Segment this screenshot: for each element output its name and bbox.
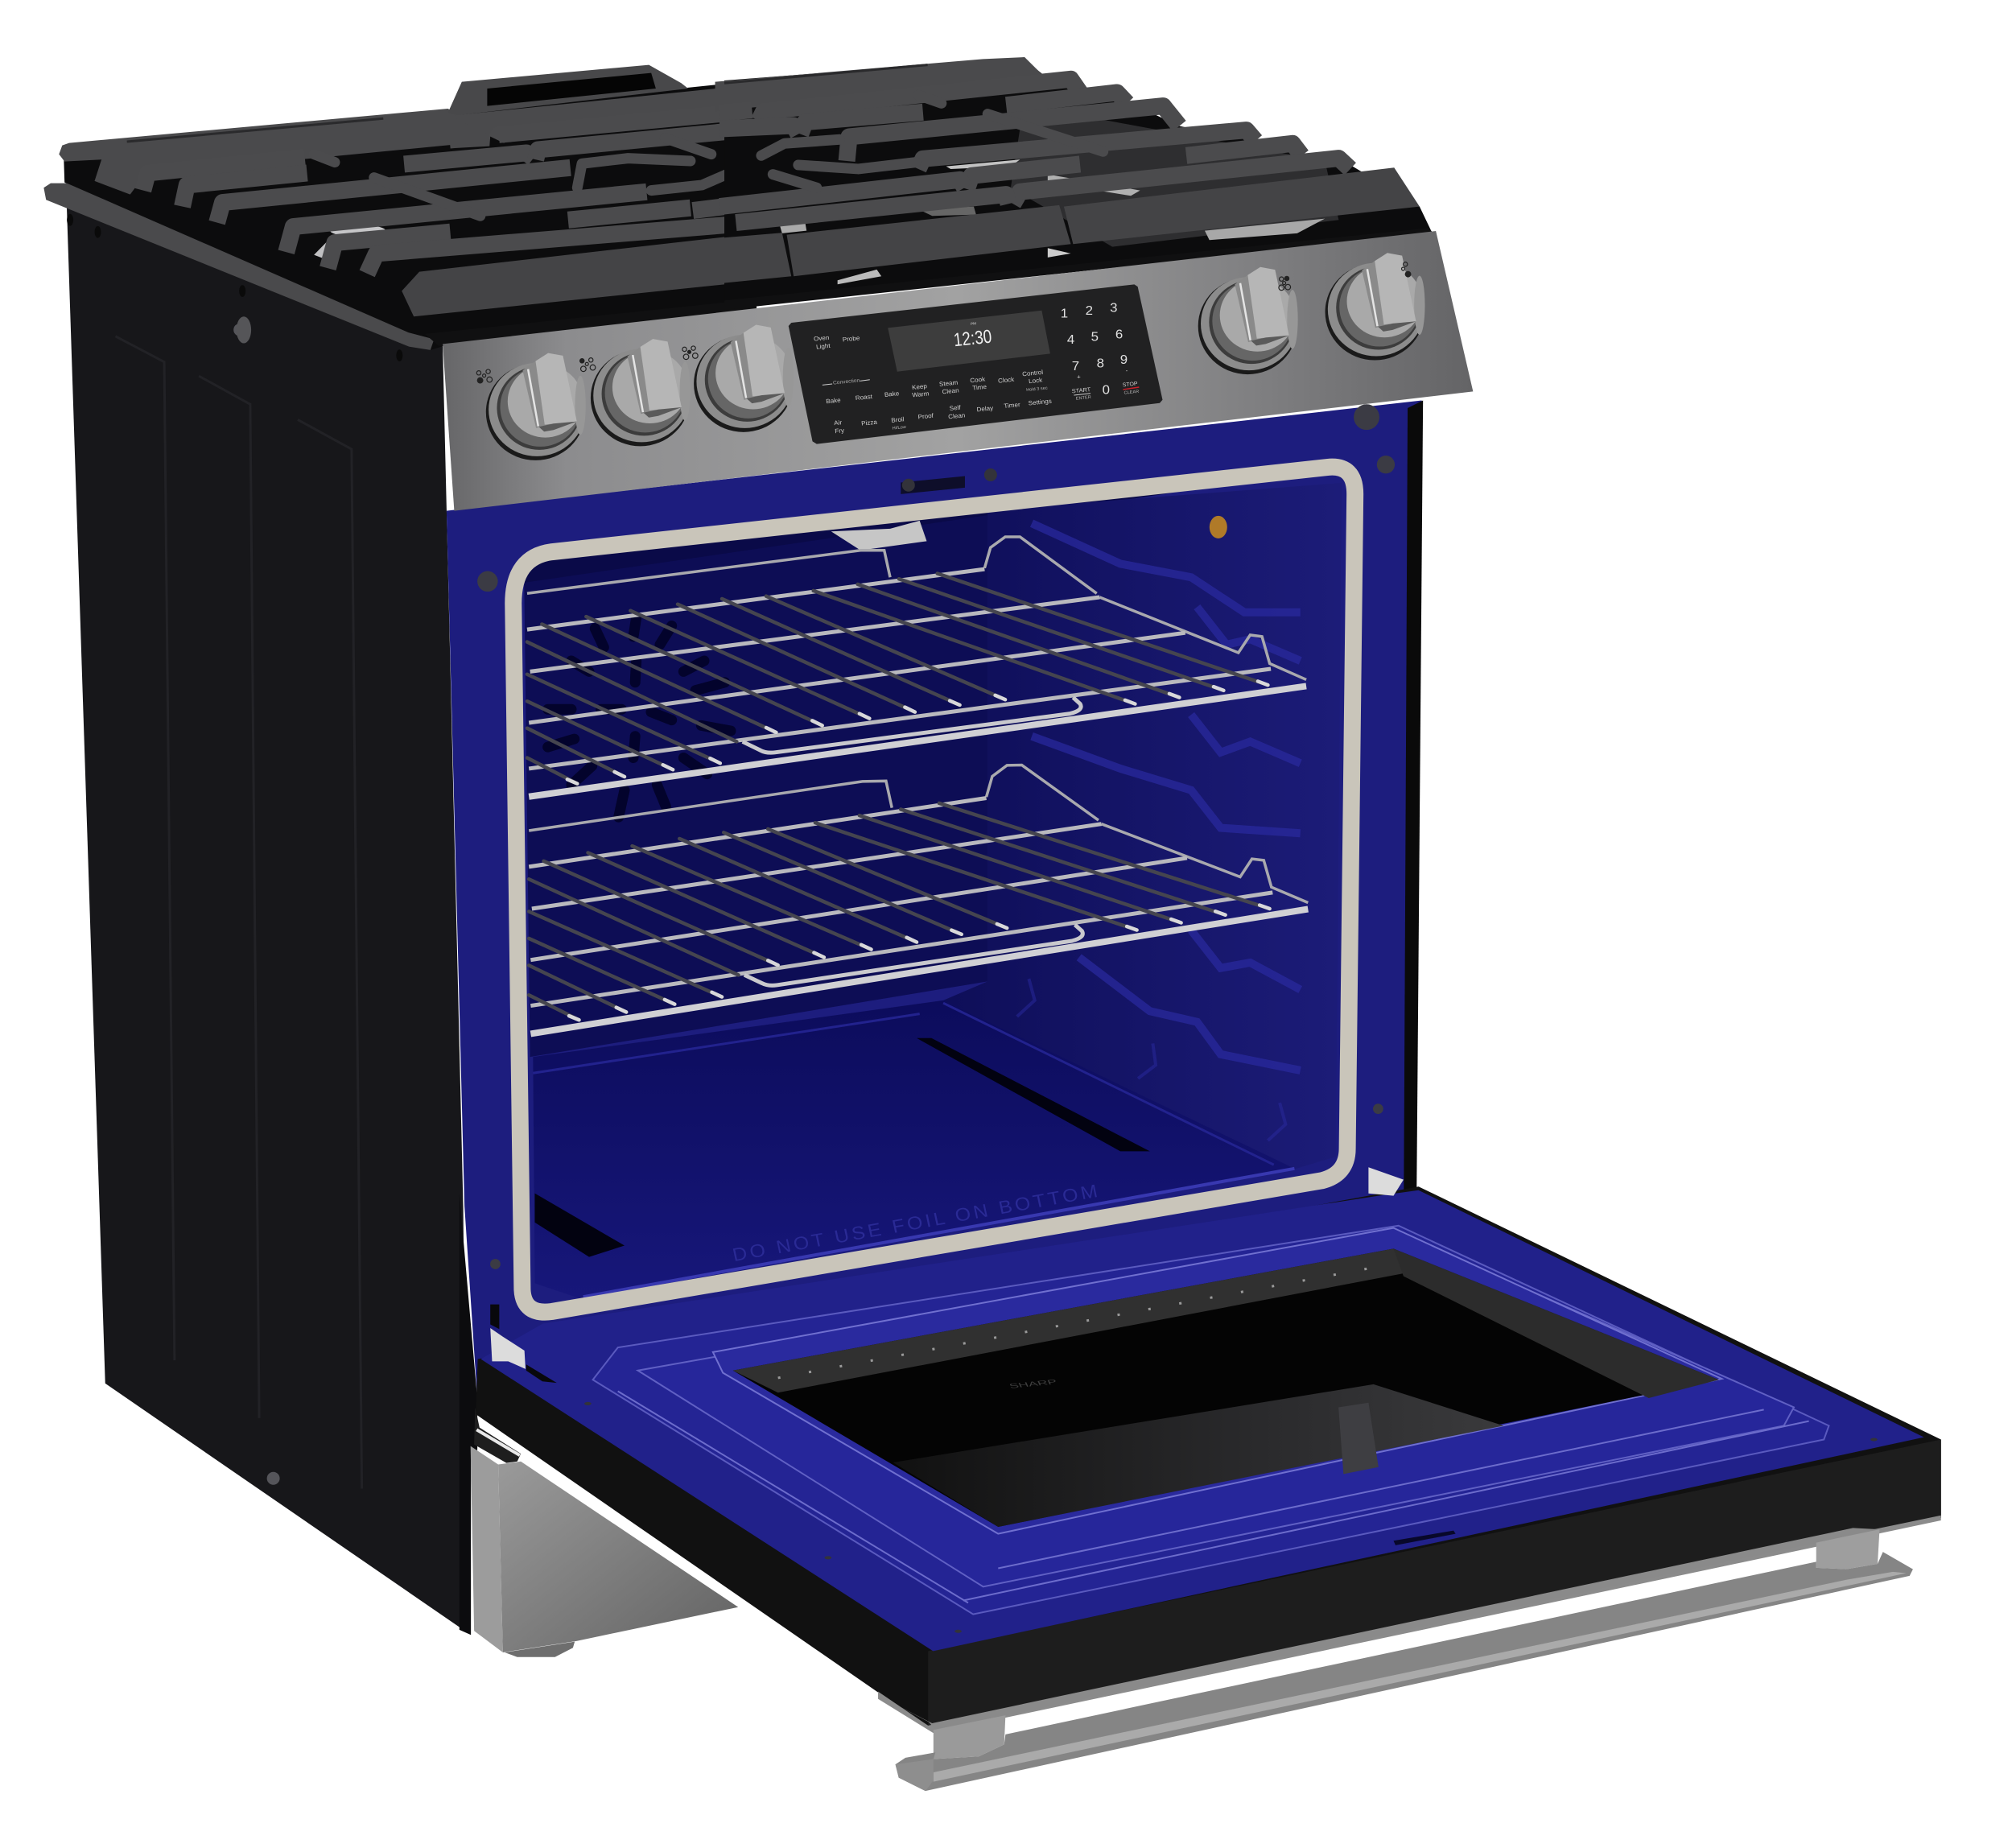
back plate right (715, 57, 1045, 111)
door handle (885, 1528, 1913, 1791)
cooktop dark base right (711, 57, 1433, 310)
front grate block left (402, 233, 757, 316)
brass bolt (1210, 516, 1227, 538)
function keys: Proof (917, 412, 934, 421)
keypad numbers: 1 (1061, 307, 1068, 320)
start and stop keys: ENTER (1076, 395, 1091, 402)
door front edge (928, 1439, 1941, 1727)
steel strip under door (878, 1516, 1941, 1733)
function keys: Timer (1004, 401, 1020, 410)
keypad numbers: 2 (1086, 303, 1093, 318)
steel strip under door (885, 1528, 1879, 1730)
back plate left (59, 109, 490, 195)
function keys: Cook (970, 376, 986, 384)
blue door liner (480, 1190, 1924, 1651)
function keys: Clean (942, 387, 959, 395)
control panel (443, 231, 1473, 511)
door latch on frame (901, 468, 997, 494)
function keys: Delay (976, 405, 994, 413)
window imprint text: SHARP (1008, 1378, 1058, 1390)
kick top bar (474, 1408, 521, 1463)
start and stop keys: START (1071, 386, 1091, 394)
start and stop keys: STOP (1122, 382, 1138, 388)
keypad numbers (1061, 301, 1128, 397)
wall ribs (1032, 523, 1301, 1070)
keypad numbers: 9 (1120, 353, 1128, 367)
right hinge (1368, 1167, 1404, 1196)
foot (505, 1642, 575, 1657)
knob 5 (1326, 253, 1424, 361)
door body (476, 1186, 1941, 1727)
back wall (524, 515, 987, 1057)
keypad numbers: - (1126, 367, 1128, 374)
liner highlights (618, 1391, 1809, 1603)
lcd window (888, 311, 1050, 372)
function keys: Bake (826, 397, 842, 405)
function keys: Probe (842, 334, 860, 343)
liner steps (593, 1226, 1829, 1615)
left hinge (490, 1305, 557, 1383)
keypad numbers: 5 (1091, 330, 1099, 344)
lower oven rack (529, 760, 1308, 1033)
window upper lip (733, 1248, 1405, 1392)
front lip (724, 228, 1433, 310)
grate long bars right (719, 79, 1350, 223)
window right rail (1394, 1248, 1719, 1398)
chrome interior (1011, 118, 1338, 247)
cavity ceiling (518, 467, 1345, 585)
oven control display (789, 284, 1163, 444)
function keys: Convection (833, 377, 860, 386)
right wall (943, 483, 1342, 1170)
upper oven rack (527, 537, 1306, 797)
oven floor (533, 1000, 1294, 1300)
keypad numbers: 0 (1103, 383, 1110, 397)
back plate middle (455, 89, 723, 134)
side panel (67, 205, 477, 1635)
function keys: Self (949, 404, 962, 412)
keypad numbers: 8 (1097, 357, 1104, 371)
function keys: Hi/Low (892, 425, 906, 431)
door screws (584, 1402, 1878, 1633)
function keys: Oven (814, 334, 830, 343)
kick plate and foot (471, 1408, 738, 1657)
wall arcs (1017, 979, 1285, 1141)
handle posts (934, 1715, 1005, 1759)
oven door (476, 1167, 1941, 1733)
light bracket (831, 521, 926, 551)
keypad numbers: 3 (1110, 301, 1118, 316)
floor imprint text: DO NOT USE FOIL ON BOTTOM (731, 1181, 1103, 1266)
window interior floor (893, 1384, 1503, 1527)
floor slots (917, 1038, 1150, 1151)
knob 4 (1198, 267, 1298, 374)
front lip left (425, 299, 757, 346)
door gasket (513, 467, 1355, 1312)
function keys: Broil (891, 415, 905, 424)
function keys: Clock (998, 376, 1015, 385)
kick plate main face (498, 1462, 738, 1652)
start and stop keys: CLEAR (1124, 390, 1140, 396)
touch panel (789, 284, 1163, 444)
rim screws (67, 214, 402, 361)
keypad numbers: + (1077, 373, 1081, 380)
function keys (814, 334, 1052, 435)
keypad numbers: 7 (1072, 359, 1079, 373)
function keys: Pizza (861, 419, 878, 427)
function keys: Lock (1029, 377, 1043, 385)
function keys: Hold 3 sec (1026, 386, 1048, 393)
grate long bars left (143, 111, 757, 274)
oven cavity (518, 467, 1345, 1300)
burner indicator icons (476, 262, 1411, 383)
oven front frame (447, 400, 1422, 1399)
clock: PM (971, 321, 976, 326)
convection fan (548, 617, 731, 817)
function keys: Time (972, 383, 987, 392)
function keys: Settings (1028, 398, 1052, 406)
handle slot (487, 73, 656, 106)
knob 1 (486, 353, 586, 460)
grate cross bars right (761, 95, 1103, 188)
front grate blocks (711, 233, 791, 284)
door window opening (733, 1248, 1719, 1527)
function keys: Fry (835, 427, 845, 435)
function keys: Light (816, 342, 831, 351)
function keys: Bake (884, 390, 900, 398)
cooktop (43, 57, 1433, 361)
perimeter rim (43, 184, 434, 350)
left burner (314, 225, 385, 260)
cooktop dark base left (43, 65, 757, 361)
grate handle (448, 65, 688, 115)
kick plate side facet (471, 1446, 503, 1652)
clock: 12:30 (953, 326, 993, 351)
handle bar (896, 1552, 1913, 1791)
door latch slot (1394, 1531, 1456, 1545)
keypad numbers: 6 (1115, 328, 1123, 341)
function keys: Steam (939, 379, 959, 388)
function keys: Clean (948, 412, 966, 420)
frame screws (477, 404, 1395, 1269)
keypad numbers: 4 (1067, 332, 1074, 347)
start and stop keys (1071, 382, 1140, 402)
right black edge (1404, 400, 1423, 1196)
knob 2 (591, 339, 691, 446)
function keys: Roast (855, 393, 873, 402)
function keys: Warm (912, 390, 930, 398)
grate cross bars left (314, 138, 730, 216)
function keys: Control (1022, 369, 1044, 377)
function keys: Keep (912, 382, 928, 391)
function keys: Air (834, 419, 843, 427)
knob 3 (694, 325, 794, 432)
